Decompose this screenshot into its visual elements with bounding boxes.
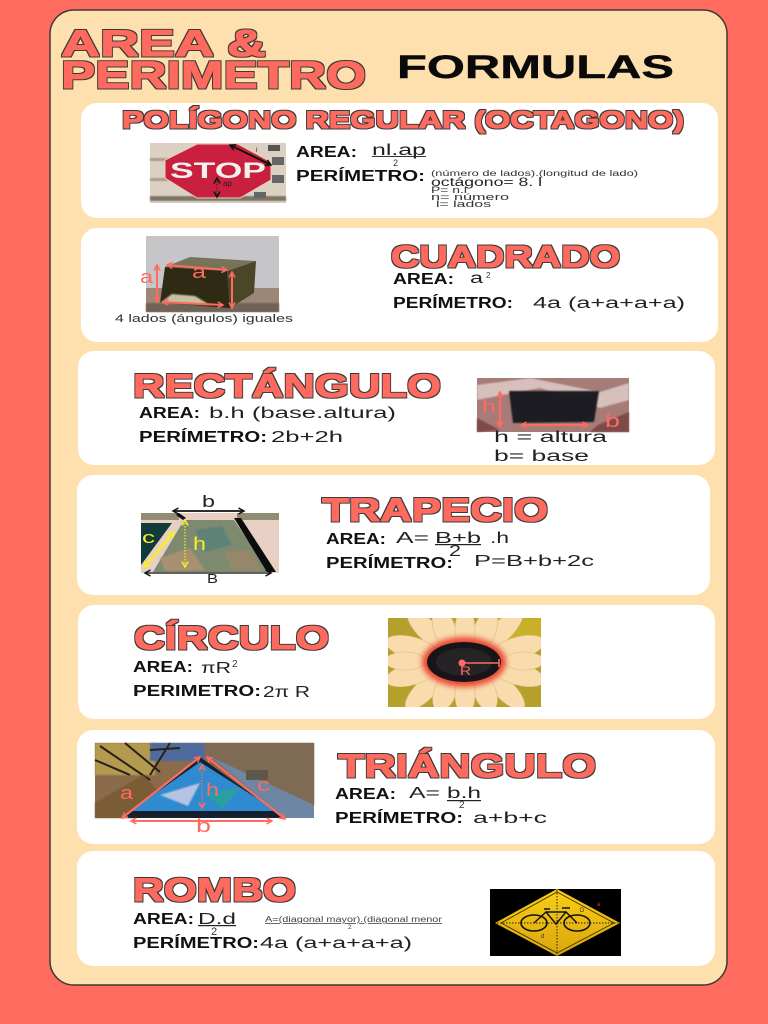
formula: area círculo bbox=[133, 659, 238, 677]
formula: perímetro triángulo: a+b+c bbox=[473, 810, 547, 827]
formula: area trapecio: AREA: bbox=[326, 531, 386, 548]
title: area y perimetro: AREA & bbox=[61, 23, 266, 64]
formula: area polígono bbox=[296, 142, 426, 168]
formula: area triángulo: 2 bbox=[459, 800, 465, 811]
formula: area triángulo: b.h bbox=[447, 785, 481, 802]
photo: rectangle in rock: b bbox=[605, 411, 620, 431]
formula: perímetro círculo: PERIMETRO: bbox=[133, 683, 261, 700]
photo: bicycle sign: a bbox=[597, 902, 601, 908]
formula: perímetro polígono: (número de lados).(longitud de lado) bbox=[431, 169, 639, 178]
formula: area trapecio: .h bbox=[490, 530, 509, 547]
photo: stop sign bbox=[150, 143, 286, 203]
heading: cuadrado: CUADRADO bbox=[391, 239, 620, 274]
heading: rectángulo: RECTÁNGULO bbox=[133, 368, 441, 404]
formula: perímetro rectángulo: PERÍMETRO: bbox=[139, 429, 267, 446]
photo: bicycle sign: d bbox=[541, 934, 544, 940]
formula: perímetro rombo: 4a (a+a+a+a) bbox=[260, 935, 412, 952]
photo: rectangle in rock bbox=[477, 378, 629, 432]
note: variables rectángulo: h = altura bbox=[494, 429, 608, 446]
title: area y perimetro bbox=[61, 23, 366, 97]
formula: perímetro rectángulo bbox=[139, 429, 343, 446]
panel: rombo bbox=[77, 851, 715, 966]
formula: perímetro polígono: l= lados bbox=[436, 199, 492, 209]
title: area y perimetro: PERIMETRO bbox=[61, 55, 366, 97]
label: B trapecio: B bbox=[207, 571, 218, 586]
caption: 4 lados: 4 lados (ángulos) iguales bbox=[115, 313, 294, 325]
formula: area polígono: 2 bbox=[393, 158, 398, 168]
photo: stop sign: STOP bbox=[170, 158, 266, 183]
note: variables rectángulo: b= base bbox=[494, 448, 589, 465]
formula: area trapecio: 2 bbox=[449, 543, 461, 560]
formula: area círculo: AREA: bbox=[133, 659, 193, 676]
formula: area cuadrado: AREA: bbox=[393, 271, 454, 288]
formula: perímetro polígono bbox=[296, 168, 639, 209]
formula: area polígono: nl.ap bbox=[372, 142, 426, 159]
formula: area rombo bbox=[133, 911, 236, 938]
photo: sunflower: R bbox=[460, 664, 471, 678]
photo: stop sign: l bbox=[256, 148, 257, 154]
formula: area rombo: D.d bbox=[198, 911, 236, 928]
photo: sunflower bbox=[383, 605, 547, 715]
photo: cube bbox=[140, 236, 279, 312]
formula: area polígono: AREA: bbox=[296, 144, 357, 161]
heading: círculo: CÍRCULO bbox=[134, 620, 329, 656]
formula: area cuadrado bbox=[393, 270, 491, 288]
formula: area rombo: 2 bbox=[211, 926, 217, 938]
formula: perímetro cuadrado: 4a (a+a+a+a) bbox=[533, 295, 685, 312]
formula: area triángulo bbox=[335, 785, 481, 811]
formula: area círculo: πR bbox=[201, 660, 231, 677]
panel: triángulo bbox=[77, 730, 715, 844]
photo: stop sign: ap bbox=[223, 179, 232, 188]
formula: area rombo: AREA: bbox=[133, 911, 194, 928]
note: area rombo en palabras: A=(diagonal mayor).(diagonal menor bbox=[265, 915, 442, 924]
formula: perímetro cuadrado bbox=[393, 295, 685, 312]
formula: perímetro trapecio: P=B+b+2c bbox=[474, 553, 594, 570]
heading: rombo: ROMBO bbox=[133, 872, 296, 908]
formula: area triángulo: A= bbox=[409, 785, 440, 802]
panel: rectángulo bbox=[78, 351, 715, 465]
photo: bicycle sign bbox=[490, 889, 621, 956]
photo: triangle: a bbox=[120, 783, 134, 803]
formula: perímetro trapecio: PERÍMETRO: bbox=[326, 555, 453, 572]
note: area rombo en palabras bbox=[265, 915, 442, 931]
heading: trapecio: TRAPECIO bbox=[322, 492, 548, 528]
formula: perímetro polígono: P= n.l bbox=[431, 185, 467, 195]
formula: perímetro rombo bbox=[133, 935, 412, 952]
formula: perímetro rectángulo: 2b+2h bbox=[271, 429, 343, 446]
photo: triangle: c bbox=[257, 775, 270, 795]
heading: formulas: FORMULAS bbox=[397, 49, 674, 85]
photo: trapezoid: h bbox=[193, 534, 206, 554]
panel: círculo bbox=[78, 605, 715, 719]
note: variables rectángulo bbox=[494, 429, 608, 465]
label: b trapecio: b bbox=[202, 492, 215, 511]
formula: area rectángulo: b.h (base.altura) bbox=[209, 405, 396, 422]
formula: perímetro círculo bbox=[133, 683, 310, 701]
photo: cube: a bbox=[192, 262, 207, 282]
formula: area rectángulo bbox=[139, 405, 396, 422]
photo: cube: a bbox=[140, 267, 154, 287]
photo: trapezoid: c bbox=[142, 528, 156, 547]
formula: perímetro polígono: octágono= 8. l bbox=[431, 177, 542, 189]
formula: perímetro triángulo: PERÍMETRO: bbox=[335, 810, 463, 827]
formula: area trapecio: B+b bbox=[435, 530, 481, 547]
panel: polígono regular bbox=[81, 103, 718, 218]
formula: perímetro triángulo bbox=[335, 810, 547, 827]
formula: area rectángulo: AREA: bbox=[139, 405, 200, 422]
panel: trapecio bbox=[77, 475, 710, 595]
photo: rectangle in rock: h bbox=[482, 397, 496, 417]
formula: perímetro polígono: n= número bbox=[431, 192, 509, 202]
photo: trapezoid bbox=[141, 511, 279, 573]
formula: area triángulo: AREA: bbox=[335, 786, 396, 803]
photo: bicycle sign: D bbox=[580, 908, 585, 914]
heading: polígono regular: POLÍGONO REGULAR (OCTAGONO) bbox=[122, 106, 684, 134]
formula: area trapecio bbox=[326, 530, 509, 560]
formula: area círculo: 2 bbox=[232, 659, 238, 670]
formula: perímetro trapecio bbox=[326, 553, 594, 572]
formula: perímetro cuadrado: PERÍMETRO: bbox=[393, 295, 513, 312]
heading: triángulo: TRIÁNGULO bbox=[338, 748, 596, 784]
photo: triangle: b bbox=[196, 816, 211, 836]
formula: area cuadrado: a bbox=[470, 270, 484, 287]
photo: triangle bbox=[95, 743, 314, 836]
formula: perímetro polígono: PERÍMETRO: bbox=[296, 168, 425, 185]
photo: triangle: h bbox=[206, 780, 219, 800]
formula: area trapecio: A= bbox=[396, 530, 429, 547]
formula: perímetro rombo: PERÍMETRO: bbox=[133, 935, 259, 952]
panel: cuadrado bbox=[81, 228, 718, 342]
formula: area cuadrado: 2 bbox=[486, 271, 491, 280]
formula: perímetro círculo: 2π R bbox=[263, 684, 310, 701]
note: area rombo en palabras: 2 bbox=[348, 924, 352, 931]
